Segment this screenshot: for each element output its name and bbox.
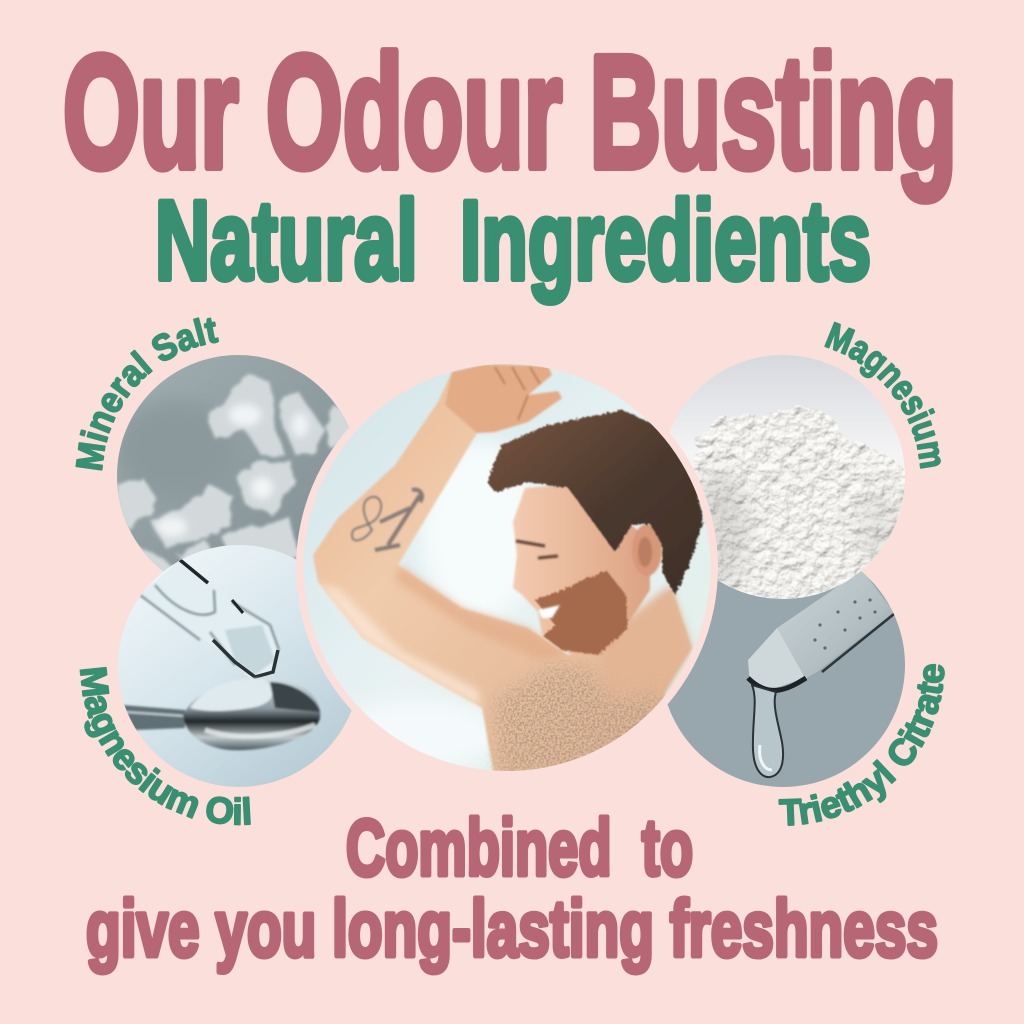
photo: magnesium oil: [118, 545, 352, 787]
label: magnesium oil: Magnesium Oil: [80, 666, 251, 826]
hair: [487, 410, 703, 595]
photo ring: [296, 356, 718, 778]
ear: [632, 524, 662, 576]
label: mineral salt: Mineral Salt: [75, 317, 220, 471]
tattoo: [352, 490, 422, 550]
icon: glass dropper: [140, 560, 279, 678]
hand: [445, 364, 562, 433]
photo: mineral salt: [117, 355, 349, 572]
beard: [535, 570, 628, 655]
face: [513, 485, 650, 655]
chest hair: [495, 665, 665, 775]
arm and torso: [313, 364, 692, 780]
arm shading: [395, 565, 568, 660]
photo: man raising arm: [295, 355, 725, 780]
label: magnesium: Magnesium: [824, 322, 941, 469]
photo: magnesium powder: [670, 355, 905, 599]
mouth: [538, 605, 560, 618]
label: triethyl citrate: Triethyl Citrate: [778, 664, 945, 826]
icon: glass dropper with drop: [748, 570, 894, 777]
icon: spoon: [122, 678, 320, 750]
neck: [615, 583, 696, 694]
eye and brow: [516, 541, 558, 558]
photo: triethyl citrate: [668, 571, 905, 787]
tagline line 1: Combined to: [346, 803, 693, 892]
